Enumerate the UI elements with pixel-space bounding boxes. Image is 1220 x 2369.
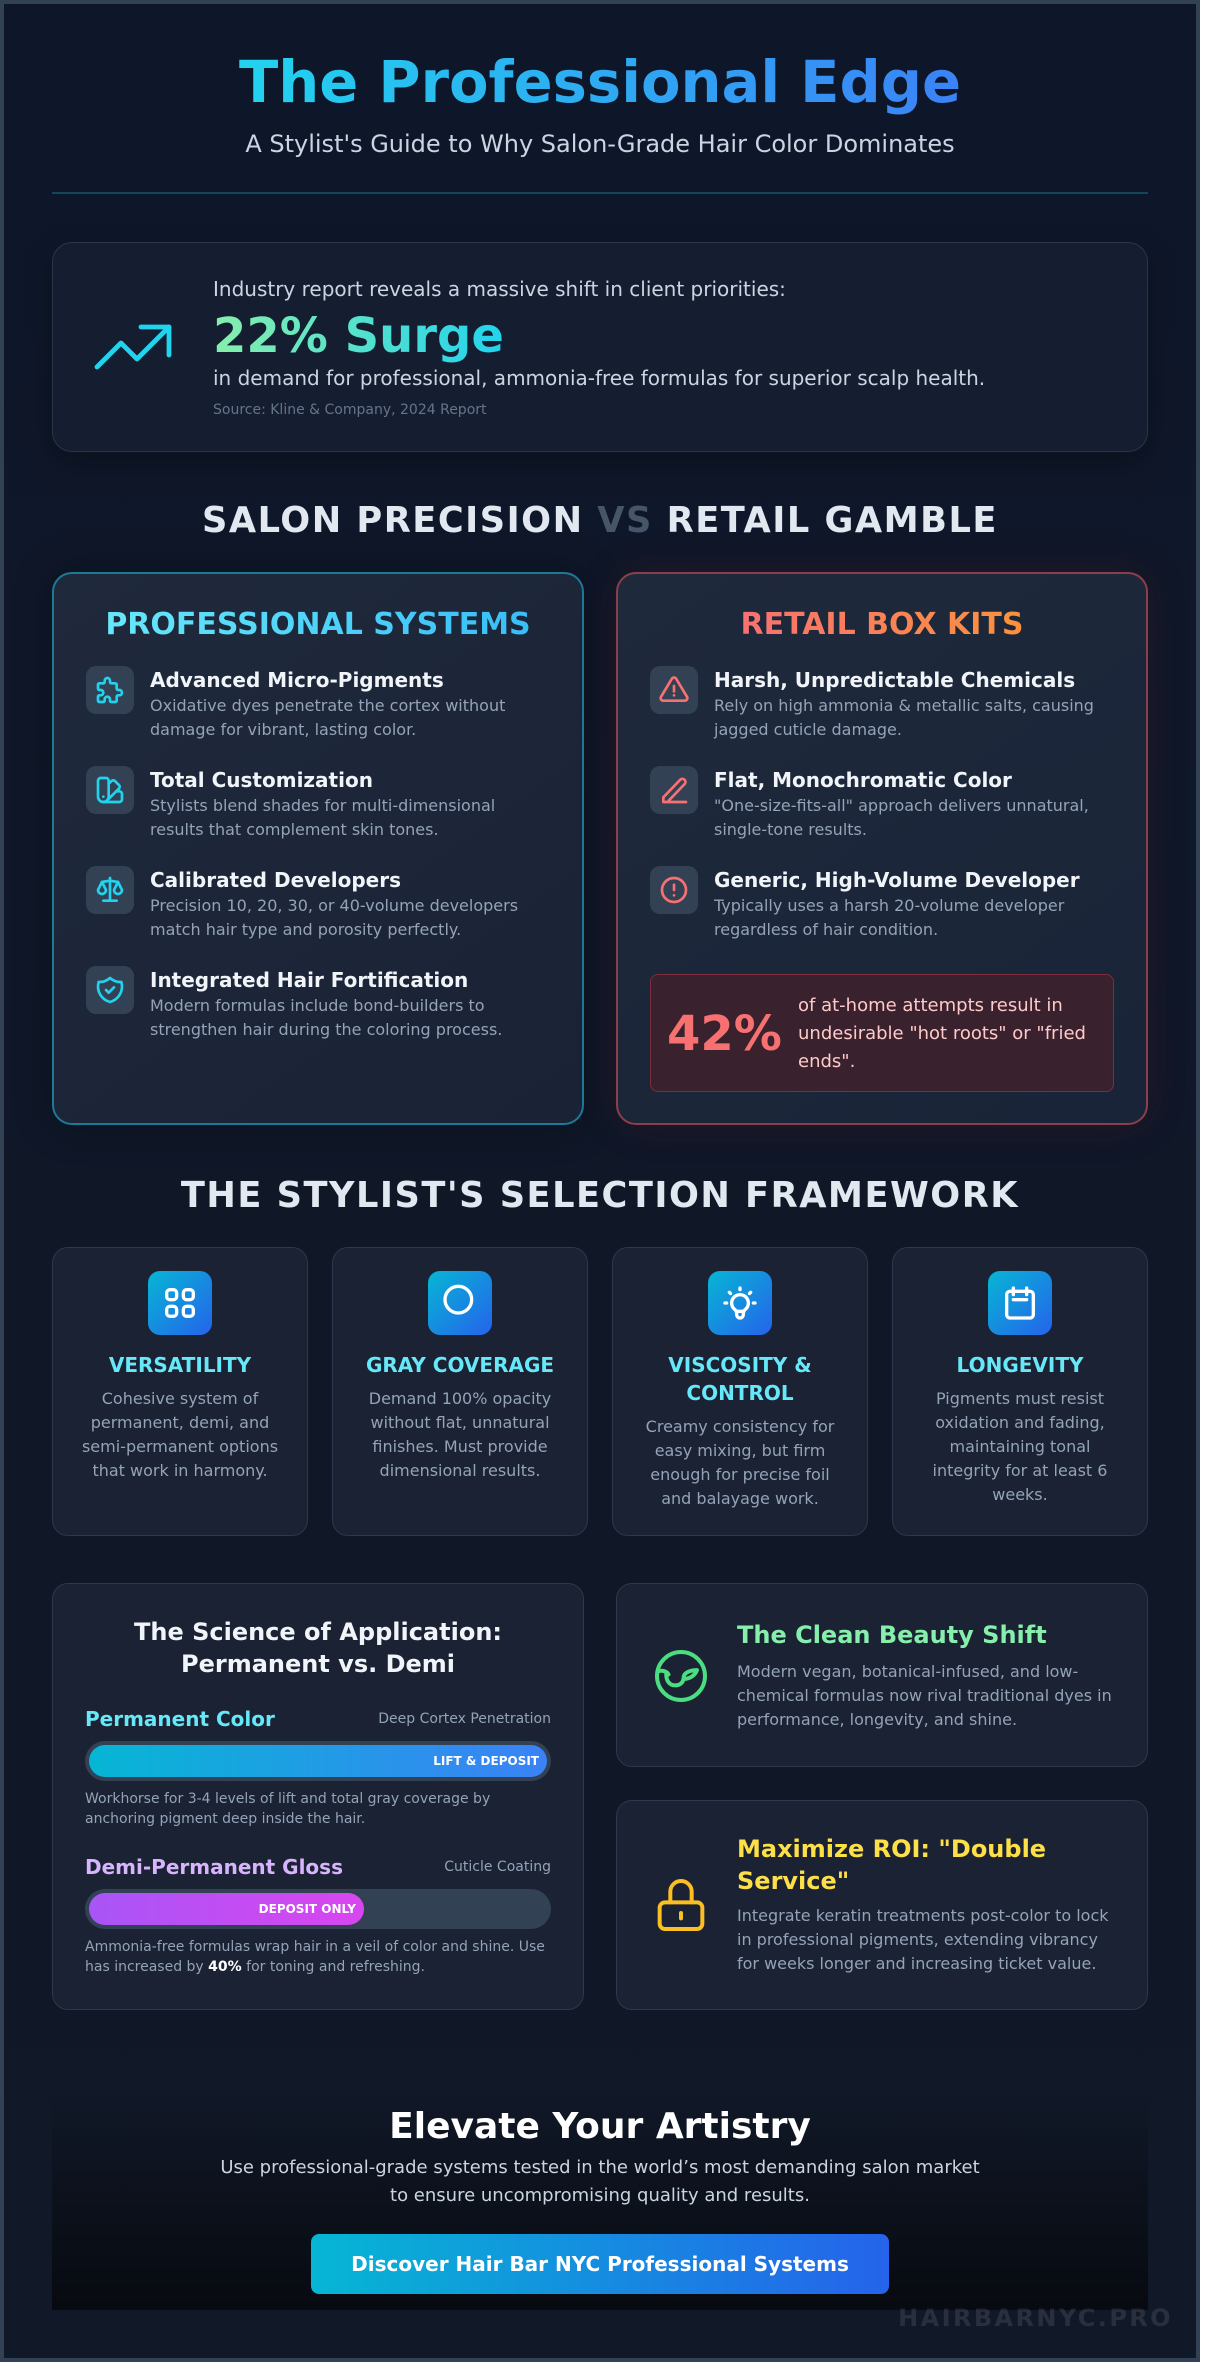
panel: call to action bbox=[52, 2090, 1148, 2310]
icon: sprout in circle bbox=[655, 1650, 707, 1702]
surge description: in demand for professional, ammonia-free formulas for superior scalp health. bbox=[213, 366, 985, 390]
text: permanent description: anchoring pigment deep inside the hair. bbox=[85, 1811, 365, 1827]
item: flat color: "One-size-fits-all" approach delivers unnatural, bbox=[714, 796, 1089, 815]
card: gray coverage: without flat, unnatural bbox=[370, 1413, 550, 1432]
card: viscosity: Creamy consistency for bbox=[646, 1417, 834, 1436]
card text: chemical formulas now rival traditional dyes in bbox=[737, 1686, 1112, 1705]
label: demi-permanent: Demi-Permanent Gloss bbox=[85, 1855, 343, 1879]
item: micro-pigments: damage for vibrant, lasting color. bbox=[150, 720, 416, 739]
icon: pen bbox=[650, 766, 698, 814]
card text bbox=[737, 1906, 1109, 1973]
item: developer: regardless of hair condition. bbox=[714, 920, 938, 939]
label: permanent color: Permanent Color bbox=[85, 1707, 275, 1731]
callout: 42 percent bbox=[650, 974, 1114, 1092]
text: permanent description: Workhorse for 3-4 levels of lift and total gray coverage by bbox=[85, 1791, 490, 1807]
label: coating: Cuticle Coating bbox=[444, 1859, 551, 1875]
panel heading: PROFESSIONAL SYSTEMS bbox=[105, 607, 531, 642]
card title: The Clean Beauty Shift bbox=[737, 1621, 1047, 1649]
icon: bulb bbox=[708, 1271, 772, 1335]
card title: Maximize ROI: "Double bbox=[737, 1835, 1046, 1863]
card: longevity: LONGEVITY bbox=[957, 1353, 1083, 1377]
item: chemicals: Harsh, Unpredictable Chemicals bbox=[714, 668, 1075, 692]
icon: lock bbox=[658, 1879, 704, 1931]
card text: in professional pigments, extending vibrancy bbox=[737, 1930, 1098, 1949]
card: longevity: integrity for at least 6 bbox=[933, 1461, 1107, 1480]
item: developers: match hair type and porosity perfectly. bbox=[150, 920, 461, 939]
panel: maximize ROI bbox=[616, 1800, 1148, 2010]
card: versatility bbox=[52, 1247, 308, 1536]
card: gray coverage bbox=[332, 1247, 588, 1536]
card text bbox=[737, 1662, 1112, 1729]
title: The Professional Edge bbox=[239, 49, 961, 116]
CTA text: Use professional-grade systems tested in the world’s most demanding salon market bbox=[220, 2157, 980, 2178]
item: micro-pigments: Oxidative dyes penetrate the cortex without bbox=[150, 696, 505, 715]
item: developer: Typically uses a harsh 20-volume developer bbox=[714, 896, 1064, 915]
item: chemicals: jagged cuticle damage. bbox=[714, 720, 902, 739]
stat text: ends". bbox=[798, 1051, 855, 1072]
icon: alert circle bbox=[650, 866, 698, 914]
card: viscosity bbox=[612, 1247, 868, 1536]
icon: trending up bbox=[94, 324, 172, 370]
item: micro-pigments bbox=[86, 666, 505, 739]
source: Source: Kline & Company, 2024 Report bbox=[213, 402, 487, 418]
item: fortification: Integrated Hair Fortification bbox=[150, 968, 468, 992]
bar: demi bbox=[85, 1889, 551, 1929]
card: longevity: weeks. bbox=[992, 1485, 1048, 1504]
icon: swatch bbox=[86, 766, 134, 814]
intro text: Industry report reveals a massive shift in client priorities: bbox=[213, 277, 786, 301]
item: developer bbox=[650, 866, 1080, 939]
stat text: undesirable "hot roots" or "fried bbox=[798, 1023, 1086, 1044]
card: versatility: permanent, demi, and bbox=[91, 1413, 269, 1432]
bar: demi: DEPOSIT ONLY bbox=[259, 1902, 356, 1916]
card: viscosity: easy mixing, but firm bbox=[655, 1441, 825, 1460]
icon: calendar bbox=[988, 1271, 1052, 1335]
item: developer: Generic, High-Volume Developer bbox=[714, 868, 1080, 892]
CTA text: to ensure uncompromising quality and results. bbox=[390, 2185, 810, 2206]
icon: shield check bbox=[86, 966, 134, 1014]
stat text: of at-home attempts result in bbox=[798, 995, 1063, 1016]
card: gray coverage: dimensional results. bbox=[380, 1461, 540, 1480]
panel: professional systems bbox=[52, 572, 584, 1125]
icon: puzzle bbox=[86, 666, 134, 714]
panel: science of application bbox=[52, 1583, 584, 2010]
item: micro-pigments: Advanced Micro-Pigments bbox=[150, 668, 444, 692]
icon: scale bbox=[86, 866, 134, 914]
item: developers bbox=[86, 866, 518, 939]
item: developers: Calibrated Developers bbox=[150, 868, 401, 892]
item: chemicals: Rely on high ammonia & metallic salts, causing bbox=[714, 696, 1094, 715]
card: versatility: that work in harmony. bbox=[92, 1461, 268, 1480]
subtitle: A Stylist's Guide to Why Salon-Grade Hair Color Dominates bbox=[245, 130, 955, 158]
panel: clean beauty bbox=[616, 1583, 1148, 1767]
surge number: 22% Surge bbox=[213, 308, 504, 364]
card: gray coverage: GRAY COVERAGE bbox=[366, 1353, 554, 1377]
card: versatility: VERSATILITY bbox=[109, 1353, 251, 1377]
heading: salon vs retail: SALON PRECISION VS RETAIL GAMBLE bbox=[202, 500, 998, 541]
card text: for weeks longer and increasing ticket value. bbox=[737, 1954, 1096, 1973]
text: demi description: Ammonia-free formulas wrap hair in a veil of color and shine. Use bbox=[85, 1939, 545, 1955]
panel heading: Permanent vs. Demi bbox=[181, 1650, 455, 1678]
item: customization bbox=[86, 766, 495, 839]
icon: warning triangle bbox=[650, 666, 698, 714]
item: customization: Total Customization bbox=[150, 768, 373, 792]
card text: Modern vegan, botanical-infused, and low- bbox=[737, 1662, 1078, 1681]
panel heading bbox=[134, 1618, 502, 1678]
card: viscosity: VISCOSITY & bbox=[668, 1353, 812, 1377]
panel heading: RETAIL BOX KITS bbox=[740, 607, 1024, 642]
card: versatility: Cohesive system of bbox=[102, 1389, 258, 1408]
text: demi description bbox=[85, 1939, 545, 1975]
text: demi description: has increased by 40% for toning and refreshing. bbox=[85, 1959, 425, 1975]
CTA text bbox=[220, 2157, 980, 2206]
card: viscosity: and balayage work. bbox=[661, 1489, 819, 1508]
card text: Integrate keratin treatments post-color to lock bbox=[737, 1906, 1109, 1925]
heading: selection framework: THE STYLIST'S SELECTION FRAMEWORK bbox=[181, 1175, 1019, 1216]
item: fortification: Modern formulas include bond-builders to bbox=[150, 996, 485, 1015]
card text: performance, longevity, and shine. bbox=[737, 1710, 1017, 1729]
item: customization: results that complement skin tones. bbox=[150, 820, 439, 839]
CTA heading: Elevate Your Artistry bbox=[389, 2106, 811, 2147]
item: flat color: Flat, Monochromatic Color bbox=[714, 768, 1012, 792]
panel heading: The Science of Application: bbox=[134, 1618, 502, 1646]
card: viscosity: enough for precise foil bbox=[650, 1465, 830, 1484]
bar: permanent: LIFT & DEPOSIT bbox=[433, 1754, 539, 1768]
panel: retail box kits bbox=[616, 572, 1148, 1125]
icon: circle bbox=[428, 1271, 492, 1335]
panel: industry surge stat bbox=[52, 242, 1148, 452]
item: developers: Precision 10, 20, 30, or 40-volume developers bbox=[150, 896, 518, 915]
card: gray coverage: finishes. Must provide bbox=[372, 1437, 548, 1456]
card: gray coverage: Demand 100% opacity bbox=[369, 1389, 551, 1408]
stat text bbox=[798, 995, 1086, 1072]
item: fortification: strengthen hair during the coloring process. bbox=[150, 1020, 502, 1039]
card: viscosity: CONTROL bbox=[686, 1381, 794, 1405]
card title: Service" bbox=[737, 1867, 849, 1895]
card title bbox=[737, 1835, 1046, 1895]
stat number: 42% bbox=[667, 1006, 782, 1062]
item: fortification bbox=[86, 966, 502, 1039]
card: longevity: Pigments must resist bbox=[936, 1389, 1104, 1408]
icon: grid bbox=[148, 1271, 212, 1335]
bar: permanent bbox=[85, 1741, 551, 1781]
item: chemicals bbox=[650, 666, 1094, 739]
card: longevity bbox=[892, 1247, 1148, 1536]
text: permanent description bbox=[85, 1791, 490, 1827]
watermark: HAIRBARNYC.PRO bbox=[898, 2304, 1173, 2332]
item: flat color bbox=[650, 766, 1089, 839]
label: penetration: Deep Cortex Penetration bbox=[378, 1711, 551, 1727]
CTA button: Discover Hair Bar NYC Professional Systems bbox=[351, 2252, 849, 2276]
CTA button bbox=[311, 2234, 889, 2294]
item: flat color: single-tone results. bbox=[714, 820, 867, 839]
card: longevity: maintaining tonal bbox=[950, 1437, 1090, 1456]
card: versatility: semi-permanent options bbox=[82, 1437, 278, 1456]
card: longevity: oxidation and fading, bbox=[935, 1413, 1105, 1432]
item: customization: Stylists blend shades for multi-dimensional bbox=[150, 796, 495, 815]
